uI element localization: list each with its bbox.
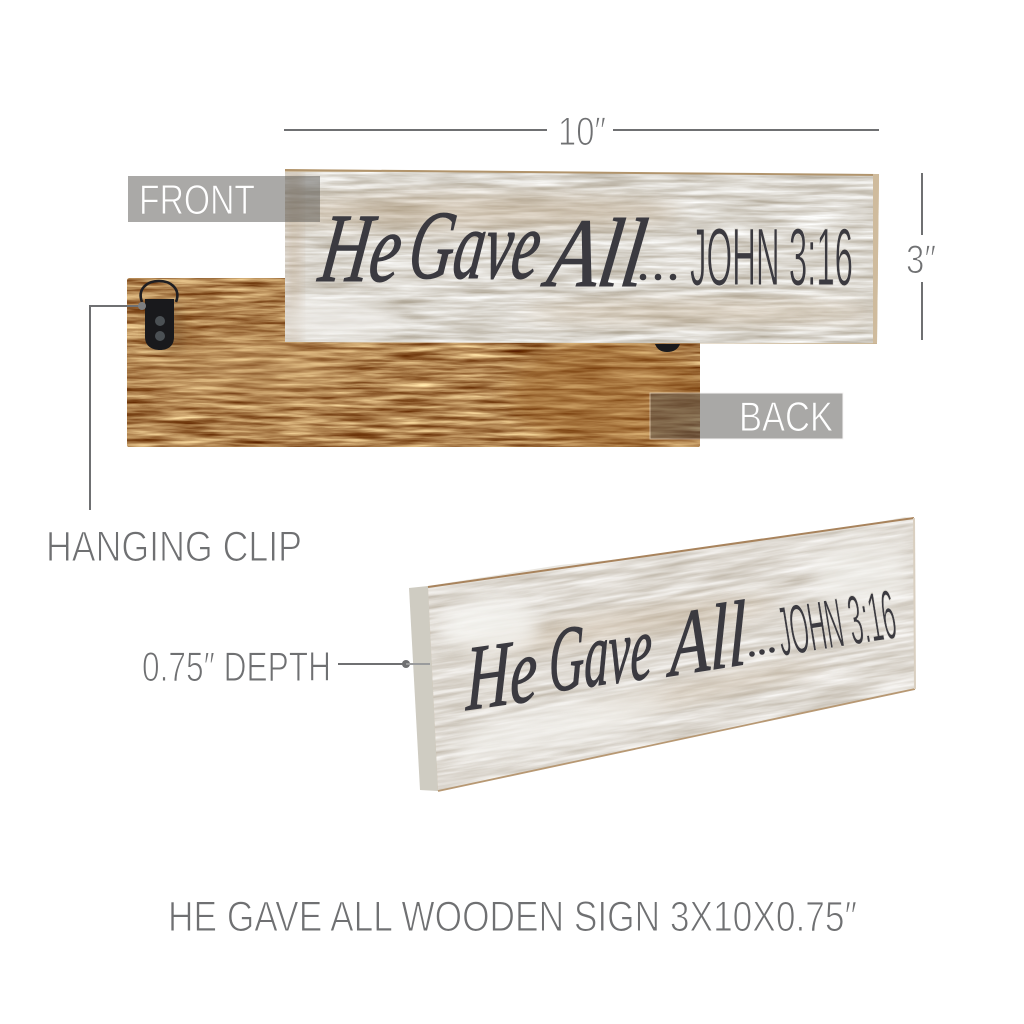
back wooden board: [127, 278, 710, 450]
board face: [428, 517, 916, 792]
sign lettering: He Gave All...: Gave: [403, 191, 548, 300]
icon: hanging clip: [141, 281, 184, 350]
front wooden board: [260, 169, 880, 344]
callout: hanging clip leader and label: [46, 302, 302, 571]
sign lettering: He Gave All...: All: [664, 581, 747, 697]
sign lettering: He Gave All...: He: [465, 618, 537, 730]
sign lettering: He Gave All...: He: [313, 194, 409, 303]
sign lettering: He Gave All...: All: [537, 199, 653, 308]
icon: second clip peeking out: [655, 344, 680, 352]
angled view of the sign: [409, 517, 916, 792]
sign lettering: He Gave All...: [313, 191, 676, 308]
callout: hanging clip leader and label: HANGING CLIP: [46, 523, 302, 571]
height dimension: 3 inches: 3″: [906, 238, 936, 282]
label: BACK: [650, 393, 843, 440]
label: BACK: BACK: [739, 393, 833, 440]
board top sliver: [428, 517, 914, 586]
width dimension: 10 inches: 10″: [558, 110, 606, 154]
title: HE GAVE ALL WOODEN SIGN 3X10X0.75″: [168, 893, 857, 941]
board side edge: [409, 586, 438, 791]
sign lettering: He Gave All...: Gave: [549, 595, 652, 712]
sign lettering: He Gave All...: [465, 581, 775, 730]
callout: depth leader and label: 0.75″ DEPTH: [142, 643, 331, 690]
label: FRONT: FRONT: [139, 176, 255, 223]
